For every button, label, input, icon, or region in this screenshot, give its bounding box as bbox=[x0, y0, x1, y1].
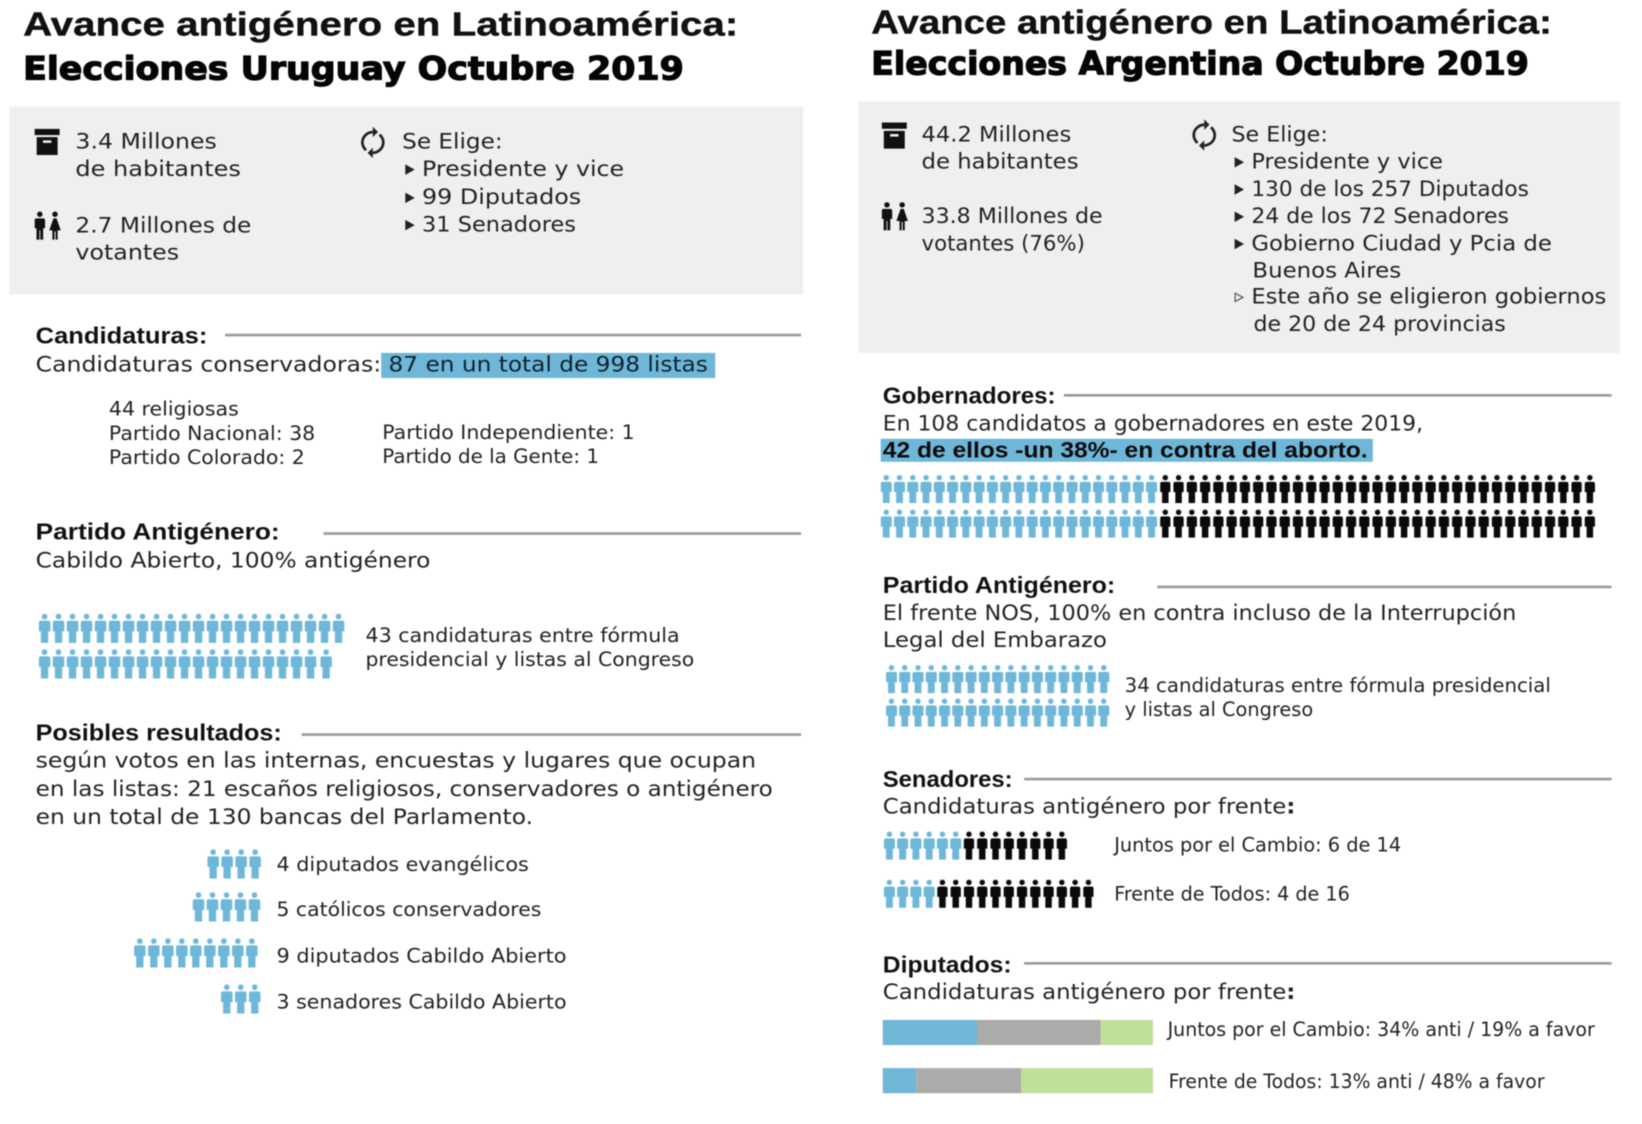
highlight: 87 of 998 bbox=[381, 353, 715, 378]
list: offices elected: 24 de los 72 Senadores bbox=[1251, 204, 1509, 229]
panel: Uruguay column bbox=[9, 7, 803, 1014]
section: Diputados: Diputados: bbox=[883, 951, 1012, 977]
title: Uruguay: Elecciones Uruguay Octubre 2019 bbox=[23, 50, 684, 88]
text: results summary bbox=[36, 749, 773, 830]
panel: Argentina key facts bbox=[859, 102, 1620, 353]
stacked bar: Frente de Todos bbox=[883, 1068, 1545, 1093]
list: offices elected: Se Elige: bbox=[1231, 122, 1328, 147]
section: Gobernadores: Gobernadores: bbox=[883, 383, 1056, 409]
section: Candidaturas: Candidaturas conservadoras: bbox=[36, 353, 381, 378]
section: Partido Antigénero Uruguay bbox=[36, 518, 801, 679]
pictogram row: 9 Cabildo Abierto deputies bbox=[134, 938, 567, 968]
pictogram row: 5 conservative catholics bbox=[193, 892, 541, 921]
pictogram row: 5 conservative catholics: 5 católicos conservadores bbox=[276, 898, 541, 921]
pictogram row: Frente de Todos senators: Frente de Todos: 4 de 16 bbox=[1114, 883, 1350, 906]
list: offices elected: 31 Senadores bbox=[422, 212, 576, 237]
panel: Argentina column bbox=[859, 5, 1620, 1093]
stacked bar: Frente de Todos: Frente de Todos: 13% anti / 48% a favor bbox=[1169, 1070, 1545, 1093]
text: results summary: según votos en las internas, encuestas y lugares que ocupan bbox=[36, 749, 756, 774]
section: Partido Antigénero Argentina bbox=[883, 572, 1612, 727]
text: voters bbox=[922, 204, 1103, 256]
text: voters: votantes bbox=[75, 241, 179, 266]
section: Partido Antigénero Argentina: Partido Antigénero: bbox=[883, 572, 1115, 598]
section: Partido Antigénero Uruguay: Cabildo Abierto, 100% antigénero bbox=[36, 549, 430, 574]
text: conservative list breakdown: 44 religiosas bbox=[109, 398, 239, 421]
text: 34 candidacies: y listas al Congreso bbox=[1125, 698, 1313, 721]
highlight: 42 against abortion bbox=[881, 439, 1373, 462]
text: 43 candidacies bbox=[365, 624, 694, 671]
pictogram row: 4 evangelical deputies: 4 diputados evangélicos bbox=[276, 853, 529, 876]
text: conservative list breakdown: Partido de la Gente: 1 bbox=[382, 445, 599, 468]
text: conservative list breakdown bbox=[109, 398, 635, 469]
pictogram row: 9 Cabildo Abierto deputies: 9 diputados Cabildo Abierto bbox=[276, 944, 567, 967]
title: Uruguay bbox=[23, 7, 738, 88]
text: inhabitants: 44.2 Millones bbox=[922, 122, 1071, 147]
section: Senadores bbox=[883, 766, 1612, 908]
icon: voters bbox=[35, 212, 61, 240]
title: Argentina: Elecciones Argentina Octubre 2019 bbox=[871, 44, 1529, 82]
text: voters: votantes (76%) bbox=[922, 231, 1085, 256]
text: inhabitants bbox=[922, 122, 1079, 175]
icon: ballot box bbox=[35, 129, 60, 155]
section: Partido Antigénero Uruguay: Partido Antigénero: bbox=[36, 518, 280, 544]
list: offices elected: Gobierno Ciudad y Pcia de bbox=[1251, 231, 1552, 256]
text: voters: 2.7 Millones de bbox=[75, 213, 251, 238]
section: Senadores: Candidaturas antigénero por frente : bbox=[883, 795, 1295, 820]
section: Gobernadores: 42 de ellos -un 38%- en contra del aborto. bbox=[883, 438, 1368, 463]
text: 34 candidacies: 34 candidaturas entre fórmula presidencial bbox=[1125, 674, 1551, 697]
pictogram row: Juntos por el Cambio senators: Juntos por el Cambio: 6 de 14 bbox=[1112, 833, 1401, 856]
title: Uruguay: Avance antigénero en Latinoamérica: bbox=[23, 7, 738, 44]
section: Diputados: Candidaturas antigénero por frente : bbox=[883, 980, 1295, 1005]
section: Gobernadores: En 108 candidatos a gobernadores en este 2019, bbox=[883, 411, 1423, 436]
text: conservative list breakdown: Partido Independiente: 1 bbox=[382, 421, 635, 444]
text: inhabitants bbox=[75, 130, 241, 182]
list: offices elected bbox=[402, 130, 624, 237]
text: results summary: en un total de 130 bancas del Parlamento. bbox=[36, 805, 533, 830]
text: NOS front: Legal del Embarazo bbox=[883, 628, 1107, 653]
section: Posibles resultados bbox=[36, 719, 801, 1014]
pictogram row: Juntos por el Cambio senators bbox=[884, 831, 1401, 860]
text: conservative list breakdown: Partido Colorado: 2 bbox=[109, 446, 305, 469]
section: Candidaturas bbox=[36, 322, 801, 469]
stacked bar: Juntos por el Cambio: Juntos por el Cambio: 34% anti / 19% a favor bbox=[1166, 1018, 1596, 1041]
text: 43 candidacies: 43 candidaturas entre fórmula bbox=[365, 624, 680, 647]
icon: ballot box bbox=[882, 123, 907, 149]
pictogram row: Frente de Todos senators bbox=[884, 880, 1350, 908]
text: inhabitants: de habitantes bbox=[75, 157, 241, 182]
list: offices elected: Este año se eligieron gobiernos bbox=[1251, 285, 1606, 310]
text: voters: 33.8 Millones de bbox=[922, 204, 1103, 229]
list: offices elected: 130 de los 257 Diputados bbox=[1251, 177, 1529, 202]
stacked bar: Juntos por el Cambio bbox=[883, 1018, 1596, 1045]
panel: Uruguay key facts bbox=[9, 107, 803, 294]
list: offices elected bbox=[1231, 122, 1606, 337]
section: Senadores: Senadores: bbox=[883, 766, 1013, 792]
icon: renewal arrows bbox=[362, 127, 383, 158]
list: offices elected: Presidente y vice bbox=[1251, 150, 1443, 175]
text: voters bbox=[75, 213, 251, 266]
pictogram: 43 candidacies bbox=[39, 614, 347, 679]
text: 43 candidacies: presidencial y listas al Congreso bbox=[365, 648, 694, 671]
text: conservative list breakdown: Partido Nacional: 38 bbox=[109, 422, 315, 445]
icon: renewal arrows bbox=[1194, 119, 1215, 151]
pictogram: 34 candidacies bbox=[886, 665, 1111, 727]
text: inhabitants: 3.4 Millones bbox=[75, 130, 217, 155]
pictogram row: 3 Cabildo Abierto senators bbox=[221, 984, 567, 1014]
title: Argentina: Avance antigénero en Latinoamérica: bbox=[871, 5, 1552, 42]
pictogram row: 4 evangelical deputies bbox=[207, 849, 529, 879]
section: Posibles resultados: Posibles resultados: bbox=[36, 719, 282, 745]
list: offices elected: Buenos Aires bbox=[1252, 258, 1401, 283]
list: offices elected: de 20 de 24 provincias bbox=[1253, 312, 1506, 337]
text: NOS front: El frente NOS, 100% en contra incluso de la Interrupción bbox=[883, 601, 1516, 626]
text: NOS front bbox=[883, 601, 1516, 653]
pictogram row: 3 Cabildo Abierto senators: 3 senadores Cabildo Abierto bbox=[276, 990, 567, 1013]
text: results summary: en las listas: 21 escaños religiosos, conservadores o antigénero bbox=[36, 777, 773, 802]
title: Argentina bbox=[871, 5, 1552, 82]
section: Gobernadores bbox=[881, 383, 1612, 538]
list: offices elected: 99 Diputados bbox=[422, 185, 581, 210]
section: Candidaturas: 87 en un total de 998 listas bbox=[389, 353, 708, 378]
pictogram: 108 governor candidates bbox=[881, 475, 1598, 538]
section: Candidaturas: Candidaturas: bbox=[36, 322, 207, 348]
text: 34 candidacies bbox=[1125, 674, 1551, 721]
list: offices elected: Se Elige: bbox=[402, 130, 503, 155]
list: offices elected: Presidente y vice bbox=[422, 157, 624, 182]
icon: voters bbox=[882, 202, 908, 230]
text: inhabitants: de habitantes bbox=[922, 150, 1079, 175]
section: Diputados bbox=[883, 951, 1612, 1093]
